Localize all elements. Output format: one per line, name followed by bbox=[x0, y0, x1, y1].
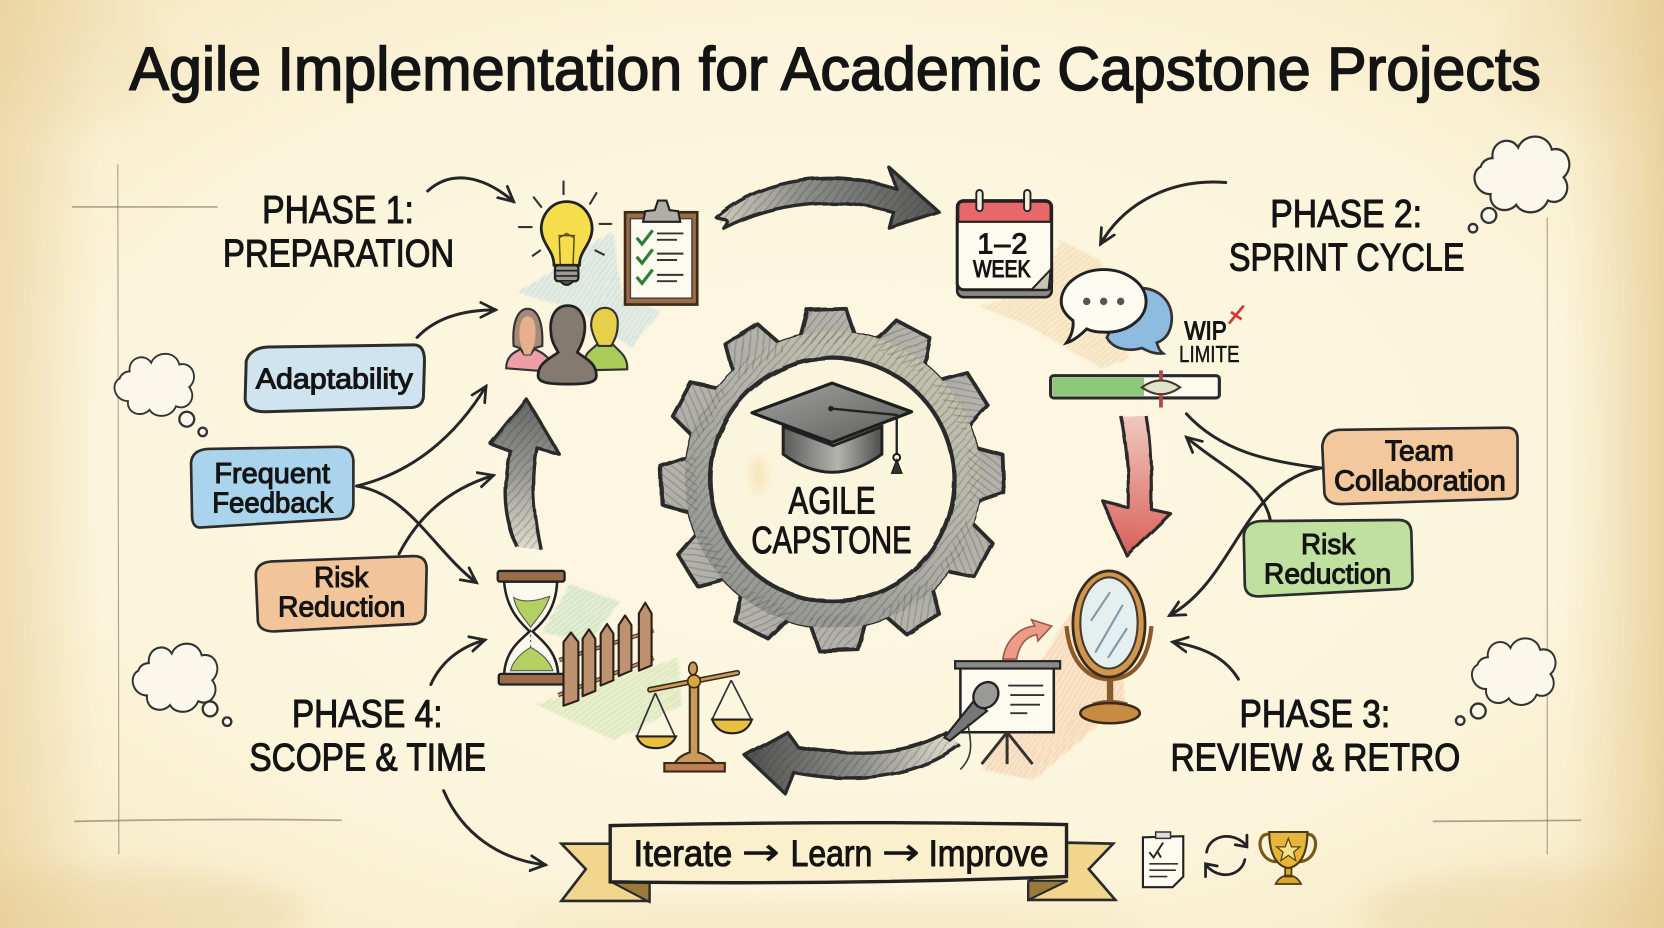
phase 1 heading bbox=[223, 188, 454, 275]
phase 1 heading: PHASE 1: bbox=[262, 188, 414, 232]
icon: hourglass bbox=[498, 571, 565, 684]
phase 4 heading: SCOPE & TIME bbox=[249, 735, 486, 779]
label: risk reduction orange: Risk bbox=[314, 562, 369, 594]
icon: checklist document bbox=[1143, 832, 1183, 887]
label: risk reduction green: Reduction bbox=[1264, 559, 1391, 591]
frame sketch lines bbox=[72, 164, 1581, 854]
phase 3 heading: PHASE 3: bbox=[1240, 692, 1390, 736]
phase 3 heading: REVIEW & RETRO bbox=[1171, 735, 1460, 779]
icon: team of people bbox=[506, 306, 627, 384]
WIP limit label: LIMITE bbox=[1179, 341, 1240, 367]
WIP limit label: WIP bbox=[1184, 318, 1227, 346]
icon: graduation cap bbox=[752, 383, 912, 473]
central gear bbox=[661, 308, 1004, 651]
banner: Learn bbox=[791, 832, 872, 874]
label: frequent feedback: Feedback bbox=[212, 488, 334, 520]
icon: clipboard bbox=[625, 201, 697, 305]
colour wash: sprint cycle bbox=[980, 240, 1130, 370]
colour wash: scope lower bbox=[535, 657, 683, 740]
label: risk reduction green bbox=[1244, 520, 1412, 596]
icon: presentation board and microphone bbox=[944, 620, 1060, 769]
label: frequent feedback bbox=[191, 447, 353, 528]
gear label: CAPSTONE bbox=[751, 519, 912, 562]
colour wash: scope upper bbox=[543, 584, 620, 643]
phase 2 heading: PHASE 2: bbox=[1270, 192, 1422, 236]
label: team collaboration bbox=[1322, 428, 1518, 504]
label: risk reduction orange: Reduction bbox=[278, 592, 405, 624]
WIP progress bar bbox=[1051, 370, 1219, 408]
icon: trophy bbox=[1260, 832, 1316, 884]
gear label: AGILE bbox=[788, 480, 876, 523]
thought cloud: lower right bbox=[1456, 638, 1556, 725]
label: risk reduction green: Risk bbox=[1301, 529, 1356, 561]
phase 1 heading: PREPARATION bbox=[223, 231, 454, 275]
banner: → bbox=[742, 831, 780, 875]
phase 3 heading bbox=[1171, 692, 1460, 779]
label: adaptability: Adaptability bbox=[256, 363, 414, 395]
icon: balance scales bbox=[637, 662, 752, 772]
icon: calendar: 1–2 bbox=[977, 229, 1027, 261]
icon: cycle arrows bbox=[1206, 835, 1247, 877]
gear label bbox=[751, 480, 912, 562]
icon: picket fence bbox=[558, 603, 654, 706]
colour wash: review bbox=[982, 605, 1125, 780]
icon: speech bubbles bbox=[1061, 270, 1172, 354]
phase 2 heading: SPRINT CYCLE bbox=[1229, 236, 1464, 280]
label: team collaboration: Team bbox=[1385, 436, 1454, 468]
title: Agile Implementation for Academic Capstone Projects bbox=[129, 35, 1541, 104]
icon: calendar bbox=[957, 190, 1052, 297]
label: risk reduction orange bbox=[256, 556, 427, 631]
banner: Improve bbox=[929, 832, 1048, 874]
arrow: right cycle downward bbox=[1103, 416, 1171, 556]
banner bbox=[561, 823, 1115, 902]
phase 4 heading: PHASE 4: bbox=[292, 692, 443, 736]
label: frequent feedback: Frequent bbox=[214, 458, 330, 490]
label: team collaboration: Collaboration bbox=[1334, 465, 1506, 497]
phase 2 heading bbox=[1229, 192, 1464, 280]
phase 4 heading bbox=[249, 692, 486, 779]
connector arrows bbox=[357, 178, 1321, 865]
icon: calendar: WEEK bbox=[973, 256, 1030, 283]
arrow: bottom cycle bbox=[745, 732, 960, 794]
label: adaptability bbox=[245, 345, 424, 412]
colour wash: preparation bbox=[517, 231, 661, 347]
thought cloud: lower left bbox=[133, 644, 231, 726]
banner: → bbox=[882, 831, 920, 875]
icon: light bulb bbox=[519, 181, 611, 285]
banner: Iterate bbox=[634, 832, 732, 874]
thought cloud: upper left bbox=[114, 354, 207, 436]
arrow: top cycle bbox=[716, 168, 939, 228]
icon: mirror bbox=[1067, 571, 1151, 723]
arrow: left cycle upward bbox=[490, 399, 559, 550]
thought cloud: upper right bbox=[1469, 137, 1569, 232]
WIP limit label bbox=[1179, 306, 1244, 367]
